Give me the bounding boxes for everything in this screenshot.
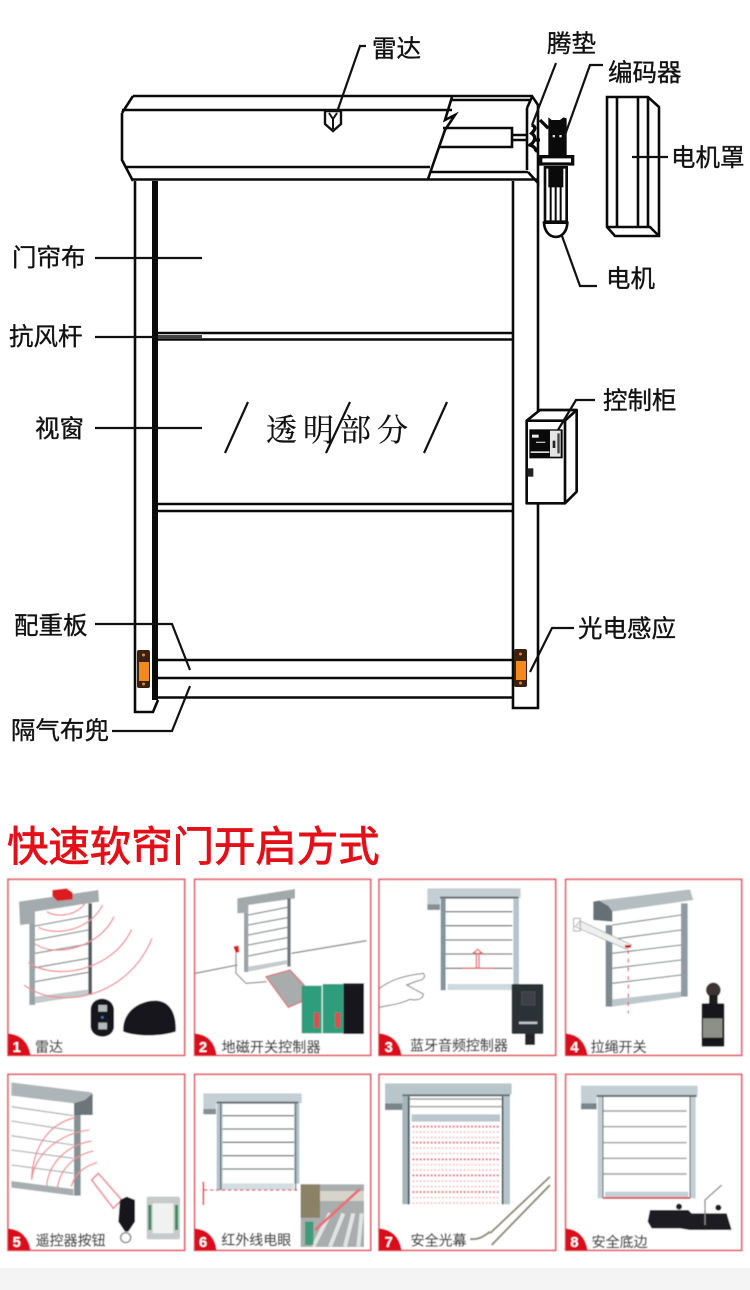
number badge <box>8 1228 31 1251</box>
number badge <box>379 1228 402 1251</box>
control cabinet <box>527 410 577 503</box>
right orange photoelectric sensor <box>514 649 527 687</box>
label: air-seal pocket: 隔气布兜 <box>11 717 109 745</box>
label: tension pad: 腾垫 <box>547 30 596 58</box>
number badge <box>195 1033 217 1056</box>
bottom grey band <box>0 1268 750 1290</box>
number badge: 4 <box>570 1040 579 1056</box>
door curtain bars <box>158 333 513 698</box>
number badge: 6 <box>199 1235 207 1251</box>
signal waves <box>32 1118 97 1188</box>
door illustration <box>427 888 521 990</box>
radar waves <box>24 903 152 998</box>
leader lines <box>95 46 668 731</box>
caption: 拉绳开关 <box>591 1039 647 1055</box>
number badge: 1 <box>13 1040 21 1056</box>
door illustration <box>195 889 367 973</box>
number badge <box>379 1033 402 1056</box>
caption: 雷达 <box>35 1039 63 1055</box>
up arrow <box>462 949 493 968</box>
panel 7: safety light curtain <box>379 1074 556 1251</box>
label: wind bar: 抗风杆 <box>9 323 82 351</box>
pull cord <box>574 918 632 1013</box>
panel 5: remote control button <box>8 1074 185 1251</box>
receiver module <box>147 1197 180 1239</box>
door header box <box>122 96 538 183</box>
transparent window text: 透明部分 <box>266 413 414 448</box>
title: 快速软帘门开启方式 <box>7 824 380 870</box>
caption: 红外线电眼 <box>221 1232 291 1248</box>
control box <box>512 984 543 1045</box>
caption: 地磁开关控制器 <box>222 1039 321 1055</box>
caption: 安全底边 <box>592 1234 648 1250</box>
photo of photo eye <box>301 1184 364 1247</box>
caption: 蓝牙音频控制器 <box>410 1038 508 1054</box>
door illustration <box>19 890 99 1005</box>
panel 2: ground magnetic switch controller <box>195 879 371 1056</box>
door illustration <box>203 1093 302 1190</box>
label: counterweight plate: 配重板 <box>14 612 88 640</box>
caption: 安全光幕 <box>411 1233 467 1249</box>
transparent window text <box>225 402 447 453</box>
black key fob <box>118 1197 135 1243</box>
label: motor: 电机 <box>606 265 655 293</box>
panel 4: pull cord switch <box>566 879 742 1056</box>
door illustration <box>11 1082 93 1196</box>
caption: 遥控器按钮 <box>36 1233 106 1249</box>
radar products <box>91 999 176 1037</box>
floor loop and sensor <box>233 945 304 1007</box>
number badge <box>8 1033 31 1056</box>
left orange photoelectric sensor <box>137 650 150 688</box>
door illustration <box>581 1086 698 1198</box>
panel 3: bluetooth audio controller <box>379 879 556 1056</box>
motor and encoder assembly <box>530 117 573 237</box>
door illustration <box>593 889 693 1007</box>
number badge <box>566 1033 588 1056</box>
label: photoelectric sensor: 光电感应 <box>578 615 676 643</box>
safety edge device <box>648 1185 732 1230</box>
label: encoder: 编码器 <box>608 59 682 87</box>
radar sensor <box>325 111 341 131</box>
door structure diagram <box>9 30 744 745</box>
label: control cabinet: 控制柜 <box>603 387 676 415</box>
remote outline <box>92 1173 122 1208</box>
number badge: 7 <box>385 1235 393 1251</box>
number badge: 3 <box>385 1040 393 1056</box>
panel 6: infrared photo eye <box>195 1074 371 1251</box>
infrared beam <box>204 1188 300 1192</box>
hand outline <box>380 973 424 1007</box>
limit switch <box>702 983 724 1047</box>
door frame posts <box>135 181 538 712</box>
red radar box <box>52 888 73 901</box>
label: window: 视窗 <box>35 415 84 443</box>
label: curtain fabric: 门帘布 <box>12 244 86 272</box>
number badge: 2 <box>199 1040 207 1056</box>
number badge: 8 <box>570 1235 578 1251</box>
label: motor cover: 电机罩 <box>671 144 744 172</box>
light curtain dots <box>412 1127 499 1203</box>
panel 8: safety bottom edge <box>566 1074 742 1251</box>
door illustration <box>385 1083 512 1204</box>
label: radar: 雷达 <box>372 35 421 63</box>
controller boxes <box>302 983 364 1034</box>
number badge: 5 <box>13 1235 21 1251</box>
motor cover <box>607 97 659 236</box>
light curtain sensors <box>470 1177 550 1245</box>
number badge <box>566 1228 588 1251</box>
number badge <box>195 1228 217 1251</box>
panel 1: radar <box>8 879 185 1056</box>
